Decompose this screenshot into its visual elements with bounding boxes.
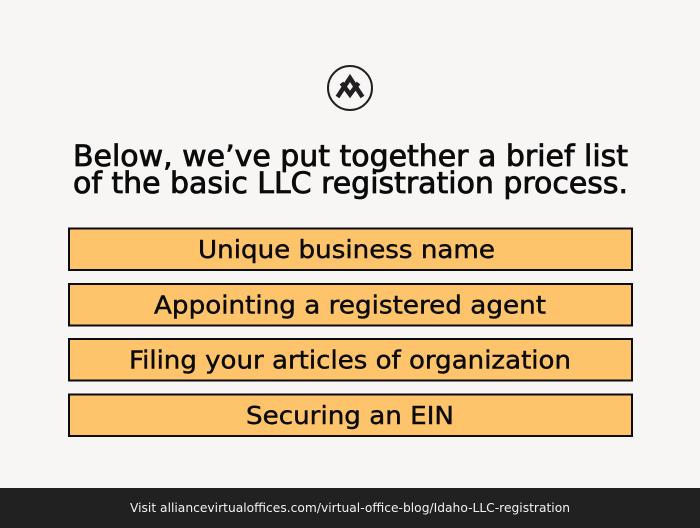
item: securing an EIN: Securing an EIN xyxy=(246,401,454,430)
icon: logo xyxy=(328,66,372,110)
item: appointing a registered agent xyxy=(69,284,632,326)
title xyxy=(73,139,628,200)
footer bar xyxy=(0,488,700,528)
item: securing an EIN xyxy=(69,394,632,436)
title: of the basic LLC registration process. xyxy=(73,166,628,200)
item: filing your articles of organization: Filing your articles of organization xyxy=(129,346,571,374)
title: Below, we’ve put together a brief list xyxy=(73,139,628,173)
footer bar: Visit alliancevirtualoffices.com/virtual-office-blog/Idaho-LLC-registration xyxy=(130,500,570,515)
item: filing your articles of organization xyxy=(69,339,632,380)
item: unique business name: Unique business name xyxy=(198,235,495,264)
item: appointing a registered agent: Appointing a registered agent xyxy=(154,290,546,320)
item: unique business name xyxy=(69,228,632,270)
